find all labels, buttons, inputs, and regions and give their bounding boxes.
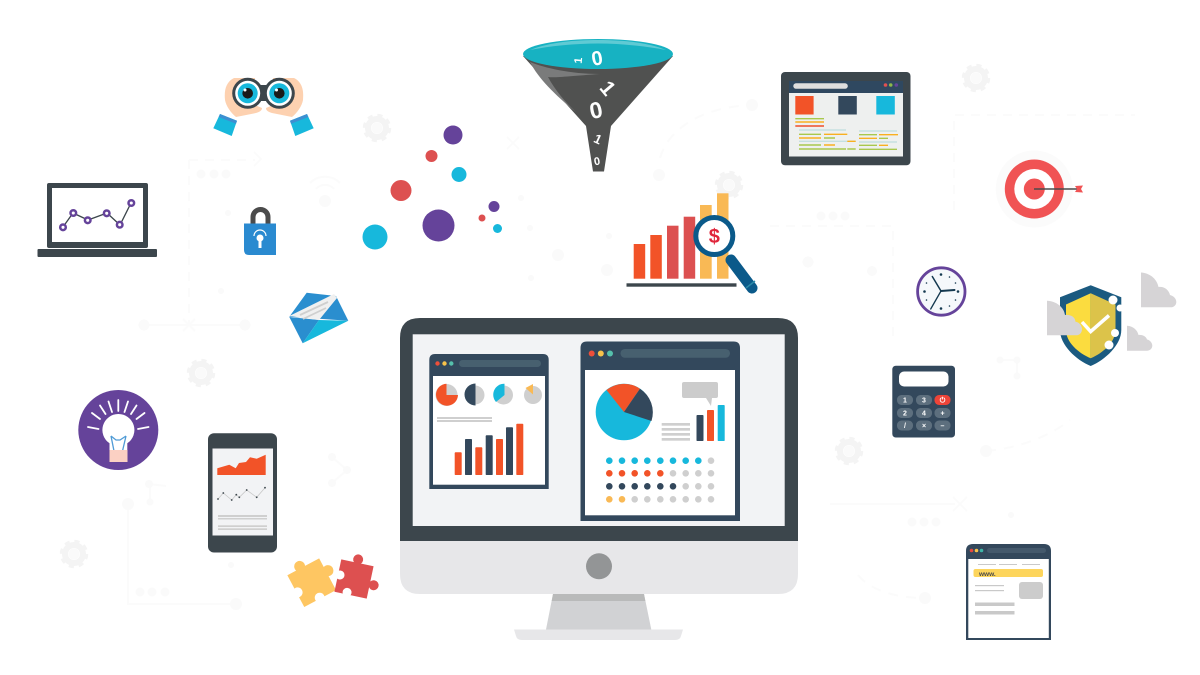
icon: calculator: 4 <box>922 410 926 418</box>
monitor body <box>400 318 798 594</box>
icon: bar chart with magnifier and dollar: $ <box>709 226 720 248</box>
icon: data funnel with binary digits: 0 <box>590 47 605 71</box>
icon: floating data dots <box>362 126 502 250</box>
icon: calculator: ⏻ <box>940 396 946 404</box>
dot matrix <box>606 457 714 503</box>
icon: puzzle pieces <box>280 548 384 612</box>
icon: calculator: – <box>941 423 945 430</box>
icon: data funnel with binary digits: 0 <box>593 155 601 168</box>
monitor stand <box>514 594 683 640</box>
window: small dashboard <box>429 354 549 489</box>
icon: calculator <box>892 366 955 438</box>
icon: data funnel with binary digits: 1 <box>573 57 585 64</box>
icon: web page window <box>966 544 1051 640</box>
background network pattern <box>122 99 1135 610</box>
icon: bar chart with magnifier and dollar <box>626 193 755 288</box>
icon: calculator: 1 <box>903 398 907 404</box>
window: large dashboard <box>580 342 740 521</box>
mini bars <box>696 405 725 441</box>
icon: smartphone with charts <box>208 433 277 552</box>
icon: light bulb badge <box>78 390 158 470</box>
icon: browser tablet with colour blocks <box>781 72 910 165</box>
background gears <box>62 66 988 566</box>
icon: calculator: × <box>922 423 926 430</box>
icon: hands holding binoculars <box>213 78 314 136</box>
icon: data funnel with binary digits: 0 <box>587 96 605 124</box>
small bar chart <box>455 424 523 475</box>
icon: padlock <box>244 210 276 255</box>
desktop monitor <box>400 318 798 640</box>
icon: calculator: 2 <box>903 410 907 418</box>
icon: data funnel with binary digits: 1 <box>592 131 604 147</box>
icon: calculator: + <box>940 410 945 418</box>
speech bubble <box>682 382 718 406</box>
icon: security shield with clouds <box>1047 272 1176 366</box>
icon: envelope with letter <box>289 293 348 343</box>
icon: data funnel with binary digits: 1 <box>595 77 620 101</box>
small pie charts <box>436 384 542 406</box>
icon: laptop with line chart <box>38 183 157 257</box>
pie chart <box>596 384 653 440</box>
icon: web page window: www. <box>978 571 996 578</box>
icon: data funnel with binary digits <box>523 39 673 172</box>
icon: calculator: 3 <box>922 398 926 404</box>
icon: target with arrow <box>996 150 1083 228</box>
icon: calculator: / <box>904 423 906 430</box>
icon: wall clock <box>918 268 965 315</box>
